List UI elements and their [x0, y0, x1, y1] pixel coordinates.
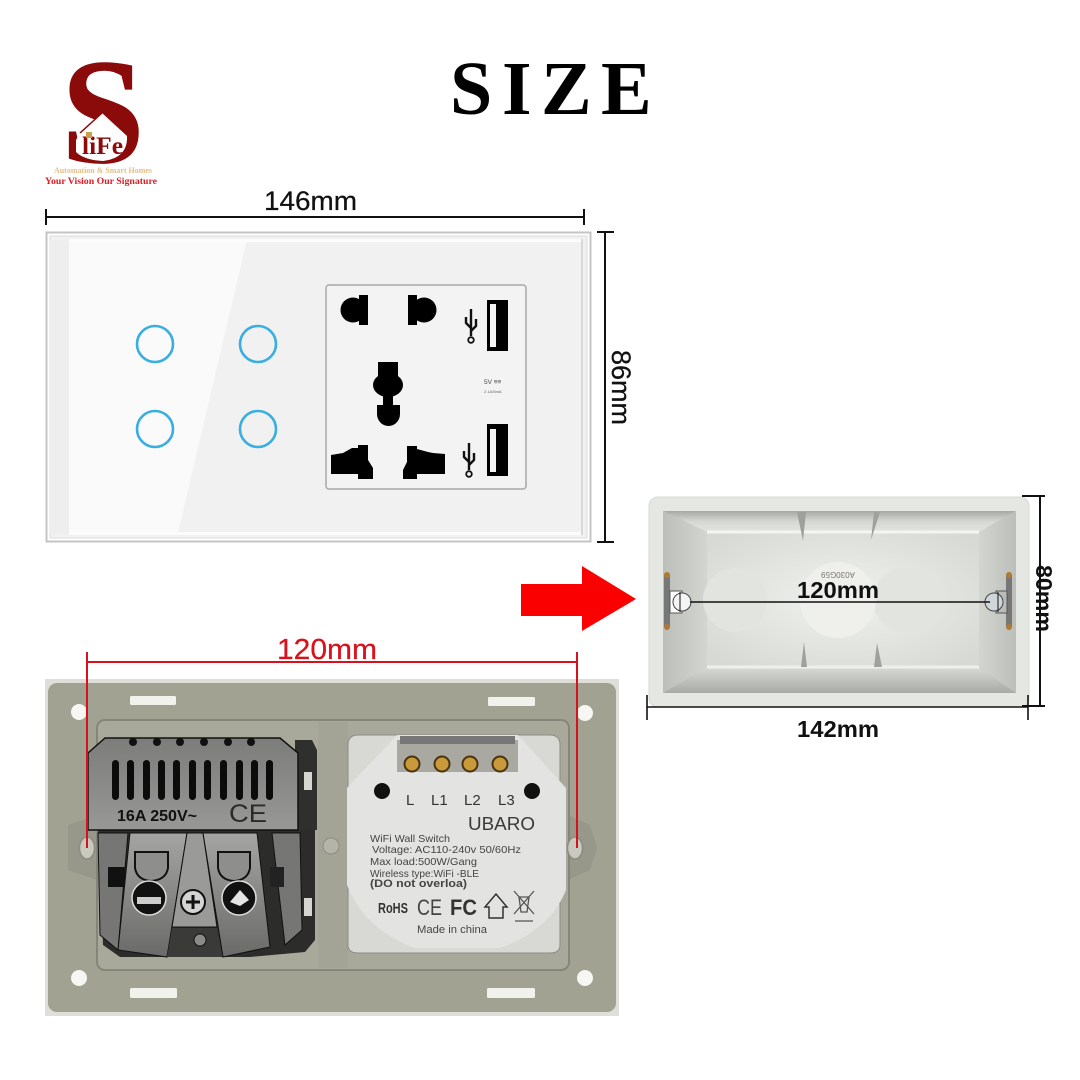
USB port upper — [487, 300, 508, 351]
right reflection — [178, 240, 582, 533]
dimension: 142mm — [647, 695, 1028, 742]
box cavity — [663, 511, 1016, 693]
terminal labels: L1 — [431, 792, 448, 809]
terminal labels: L2 — [464, 792, 481, 809]
terminal labels — [406, 792, 515, 809]
dimension: 146mm — [46, 186, 584, 225]
bottom-left slot — [331, 445, 373, 479]
certification marks: RoHS — [378, 900, 408, 917]
terminal windows — [135, 852, 168, 881]
switch module — [347, 735, 566, 953]
ribs — [797, 512, 882, 667]
UBARO brand: UBARO — [468, 814, 535, 834]
left reflection — [69, 240, 247, 533]
dimension: 80mm — [1022, 496, 1057, 706]
centre slot — [373, 362, 403, 426]
icon: house — [485, 894, 507, 918]
plate — [45, 679, 619, 1016]
terminal screws — [132, 881, 166, 915]
centre block — [172, 833, 217, 927]
spec text: (DO not overloa) — [370, 878, 467, 890]
dimension: 146mm: 146mm — [264, 186, 357, 216]
screw slot surrounds — [68, 815, 597, 880]
lower left terminal block — [118, 833, 187, 957]
switch module: CE — [417, 895, 442, 920]
glass plate — [46, 232, 590, 542]
red dimension: 120mm — [87, 634, 577, 848]
mounting holes — [71, 704, 593, 986]
lower right terminal block — [203, 833, 270, 957]
clips — [130, 696, 535, 998]
terminal screws — [404, 756, 508, 772]
centre divider — [318, 722, 348, 968]
top-right pin slot — [408, 295, 436, 325]
socket plate — [326, 285, 526, 489]
module shadow body — [98, 830, 315, 957]
upper housing — [88, 738, 298, 830]
icon: recycle bin — [514, 891, 534, 921]
recess — [97, 720, 569, 970]
USB port lower — [487, 424, 508, 476]
round face — [347, 735, 566, 948]
right screw bracket — [985, 572, 1012, 630]
top-left pin slot — [340, 295, 368, 325]
logo: tagline vision: Your Vision Our Signature — [45, 177, 157, 187]
moulded code: A030G59 — [821, 570, 855, 579]
bottom-right slot — [403, 446, 445, 479]
USB symbol lower — [464, 443, 474, 470]
switch module: FC — [450, 895, 477, 920]
dimension: 142mm: 142mm — [797, 716, 879, 742]
logo: house roof line — [80, 113, 102, 133]
CE mark: CE — [229, 800, 267, 828]
socket module — [88, 738, 317, 957]
vent slots — [112, 760, 273, 800]
knockouts — [703, 568, 767, 632]
rating text: 16A 250V~ — [117, 808, 197, 825]
USB rating text: 5V ≡≡ — [484, 379, 502, 386]
touch buttons — [137, 326, 276, 447]
spec text: WiFi Wall Switch — [370, 833, 450, 845]
right flank — [272, 833, 302, 945]
floor — [707, 532, 979, 667]
socket plate: 2.1A/5mA — [484, 389, 502, 394]
title: SIZE — [450, 47, 652, 131]
logo — [45, 29, 157, 195]
left screw bracket — [664, 572, 691, 630]
spec text: Voltage: AC110-240v 50/60Hz — [372, 844, 521, 856]
spec text: Max load:500W/Gang — [370, 856, 477, 868]
dimension: 86mm: 86mm — [606, 350, 636, 425]
spec text — [370, 833, 521, 890]
spec text: Wireless type:WiFi -BLE — [370, 868, 479, 880]
made in china: Made in china — [417, 924, 488, 936]
left flank — [98, 833, 128, 950]
terminal window — [397, 740, 518, 772]
walls — [663, 511, 1016, 532]
dimension: 80mm: 80mm — [1031, 565, 1057, 632]
logo: tagline automation: Automation & Smart Homes — [54, 166, 152, 175]
logo: house cut-out — [76, 113, 127, 161]
dimension: 86mm — [597, 232, 636, 542]
terminal labels: L — [406, 792, 414, 809]
terminal labels: L3 — [498, 792, 515, 809]
logo: window — [86, 132, 92, 138]
box rim — [649, 497, 1029, 707]
screw slots — [80, 837, 582, 859]
panel: touch switch front — [46, 232, 590, 542]
logo: liFe wordmark: liFe — [82, 133, 123, 160]
top notches — [129, 738, 255, 746]
arrow — [521, 566, 636, 631]
panel: mounting box — [649, 497, 1029, 707]
USB symbol upper — [466, 309, 476, 336]
inner 120mm line — [690, 601, 990, 603]
black dots — [374, 783, 390, 799]
panel: rear mounting plate — [45, 634, 619, 1016]
logo: S letter: S — [61, 29, 145, 195]
module body — [348, 735, 560, 953]
inner 120mm label: 120mm — [797, 577, 879, 603]
red dimension: 120mm: 120mm — [277, 634, 377, 666]
side windows — [108, 867, 125, 887]
